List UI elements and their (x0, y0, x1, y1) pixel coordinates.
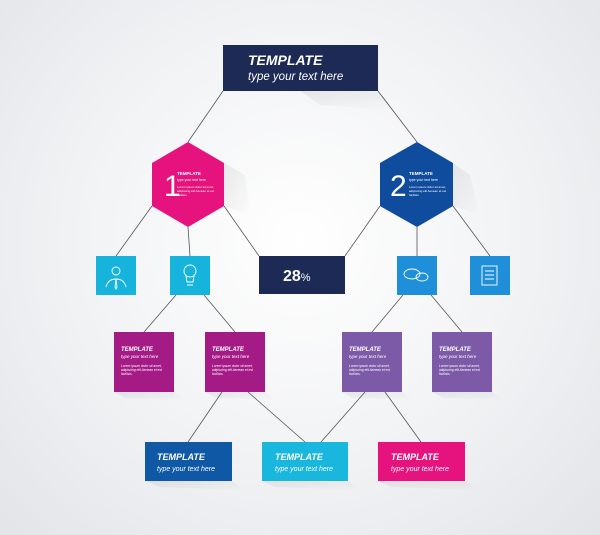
bottom box blue (145, 442, 232, 481)
purple boxes: facilisis. (121, 372, 133, 376)
icon box: bulb (170, 256, 210, 295)
purple boxes: adipiscing elit Aenean et est (439, 368, 481, 372)
hexagon 1: adipiscing elit Aenean et est (177, 189, 214, 193)
hexagon 2: adipiscing elit Aenean et est (409, 189, 446, 193)
stat box 28% (259, 256, 345, 294)
bottom box blue: type your text here (157, 466, 215, 473)
title box (223, 45, 378, 91)
stat box 28%: 28% (283, 268, 311, 285)
connector lines (116, 91, 490, 442)
hexagon 1 (152, 142, 224, 227)
title box: type your text here (248, 71, 343, 83)
purple boxes: type your text here (212, 354, 250, 359)
purple boxes: adipiscing elit Aenean et est (349, 368, 391, 372)
bottom box cyan: type your text here (275, 466, 333, 473)
hexagon 1: TEMPLATE (177, 171, 201, 176)
purple boxes: TEMPLATE (212, 347, 245, 353)
purple boxes: TEMPLATE (121, 347, 154, 353)
bottom box cyan (262, 442, 348, 481)
hexagon 2: type your text here (409, 178, 438, 182)
bottom box pink (378, 442, 465, 481)
title box: TEMPLATE (248, 52, 323, 68)
hexagon 1: facilisis. (177, 193, 188, 197)
purple boxes: facilisis. (439, 372, 451, 376)
purple boxes (114, 332, 492, 392)
purple boxes: TEMPLATE (349, 347, 382, 353)
hexagon 1: type your text here (177, 178, 206, 182)
purple boxes: type your text here (121, 354, 159, 359)
bottom box pink: TEMPLATE (391, 452, 440, 462)
bottom box pink: type your text here (391, 466, 449, 473)
icon box: chat (397, 256, 437, 295)
hexagon 1: 1 (164, 170, 181, 203)
hexagon 2 (380, 142, 453, 227)
icon box: person (96, 256, 136, 295)
purple boxes: Lorem ipsum dolor sit amet, (439, 364, 480, 368)
purple boxes: Lorem ipsum dolor sit amet, (121, 364, 162, 368)
purple boxes: type your text here (439, 354, 477, 359)
purple boxes: type your text here (349, 354, 387, 359)
hexagon 2: TEMPLATE (409, 171, 433, 176)
bottom box cyan: TEMPLATE (275, 452, 324, 462)
purple boxes: facilisis. (349, 372, 361, 376)
purple boxes: adipiscing elit Aenean et est (212, 368, 254, 372)
purple boxes: Lorem ipsum dolor sit amet, (212, 364, 253, 368)
hexagon 1: Lorem ipsum dolor sit amet, (177, 185, 214, 189)
hexagon 2: facilisis. (409, 193, 420, 197)
hexagon 2: 2 (390, 170, 407, 203)
bottom box blue: TEMPLATE (157, 452, 206, 462)
icon box: document (470, 256, 510, 295)
purple boxes: Lorem ipsum dolor sit amet, (349, 364, 390, 368)
soft shadows (114, 91, 503, 490)
purple boxes: adipiscing elit Aenean et est (121, 368, 163, 372)
hexagon 2: Lorem ipsum dolor sit amet, (409, 185, 446, 189)
purple boxes: TEMPLATE (439, 347, 472, 353)
purple boxes: facilisis. (212, 372, 224, 376)
